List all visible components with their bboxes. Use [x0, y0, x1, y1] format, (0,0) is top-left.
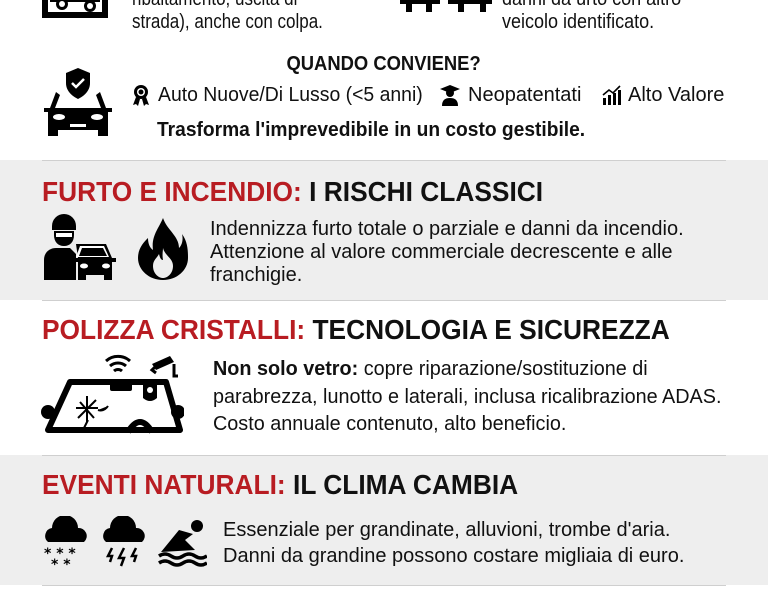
text: auto nuove: Auto Nuove/Di Lusso (<5 anni)	[158, 84, 423, 106]
icon: thief with car	[44, 214, 116, 280]
icon: car with shield	[44, 68, 112, 136]
heading: quando conviene: QUANDO CONVIENE?	[287, 53, 481, 75]
text: kasko top left	[132, 0, 323, 33]
text: collision top right: veicolo identificato.	[502, 11, 654, 33]
text: furto description: franchigie.	[210, 264, 302, 286]
text: kasko top left: strada), anche con colpa.	[132, 11, 323, 33]
text: cristalli description: Costo annuale contenuto, alto beneficio.	[213, 413, 566, 435]
icon: flood swimmer	[158, 520, 207, 567]
text: eventi description: Danni da grandine possono costare migliaia di euro.	[223, 545, 684, 567]
text: eventi description	[223, 519, 684, 567]
text: furto description: Indennizza furto totale o parziale e danni da incendio.	[210, 218, 684, 240]
heading: eventi naturali: EVENTI NATURALI: IL CLIMA CAMBIA	[42, 469, 518, 500]
icon: chart	[602, 85, 621, 105]
text: furto description	[210, 218, 684, 286]
icon: fire	[138, 218, 188, 280]
heading: furto e incendio: FURTO E INCENDIO: I RISCHI CLASSICI	[42, 176, 543, 207]
list: target groups	[133, 84, 724, 106]
icon: rollover car	[42, 0, 108, 18]
text: cristalli description: parabrezza, lunotto e laterali, inclusa ricalibrazione ADAS.	[213, 386, 721, 408]
icon: ribbon	[133, 85, 149, 106]
text: furto description: Attenzione al valore commerciale decrescente e alle	[210, 241, 672, 263]
text: collision top right	[502, 0, 681, 33]
heading: polizza cristalli: POLIZZA CRISTALLI: TECNOLOGIA E SICUREZZA	[42, 314, 670, 345]
text: tagline: Trasforma l'imprevedibile in un costo gestibile.	[157, 119, 585, 141]
icon: storm cloud	[103, 516, 145, 566]
icon: graduate	[440, 85, 460, 106]
icon: hail cloud	[44, 516, 87, 568]
icon: hail cloud: * * *	[44, 546, 76, 562]
text: cristalli description: Non solo vetro: copre riparazione/sostituzione di	[213, 358, 648, 380]
icon: collision cars	[400, 0, 492, 12]
text: eventi description: Essenziale per grandinate, alluvioni, trombe d'aria.	[223, 519, 670, 541]
text: alto valore: Alto Valore	[628, 84, 724, 106]
text: cristalli description	[213, 358, 721, 435]
text: neopatentati: Neopatentati	[468, 84, 581, 106]
icon: windshield	[41, 354, 184, 434]
